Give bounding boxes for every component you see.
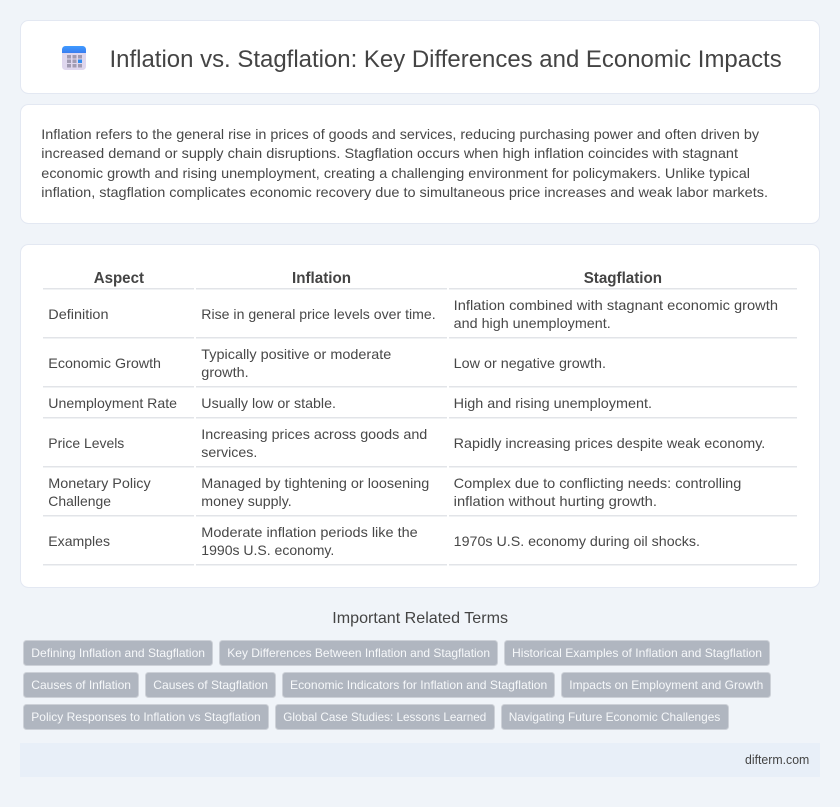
row: examples: Examples [48,533,110,549]
row: definition: Rise in general price levels over time. [201,306,436,322]
footer source: difterm.com [745,752,809,767]
row: economic growth: Economic Growth [48,355,161,371]
tag: impacts on employment [562,672,770,698]
description text: increased demand or supply chain disruptions. Stagflation occurs when high inflation coincides with stagnant [41,145,738,161]
row: examples: 1970s U.S. economy during oil shocks. [454,533,700,549]
tag: navigating future: Navigating Future Economic Challenges [509,710,720,724]
tag: causes of inflation [24,672,138,698]
row: economic growth: Typically positive or moderate [201,346,392,362]
header panel [20,20,820,94]
tag: key differences: Key Differences Between Inflation and Stagflation [227,646,490,660]
table header row: Inflation [292,270,351,287]
table header row: Stagflation [584,270,662,287]
row: monetary policy challenge: Managed by tightening or loosening [201,475,429,491]
tag: causes of stagflation: Causes of Stagflation [153,678,268,692]
row: definition: Inflation combined with stagnant economic growth [454,297,778,313]
footer bar [20,743,820,777]
tag: impacts on employment: Impacts on Employment and Growth [569,678,763,692]
row: unemployment rate: Unemployment Rate [48,395,177,411]
row: price levels: Increasing prices across goods and [201,426,427,442]
row: definition [43,297,797,338]
tag: global case studies [276,704,494,730]
row: definition: and high unemployment. [454,315,611,331]
row: economic growth: Low or negative growth. [454,355,606,371]
tag: key differences [220,640,498,666]
row: examples: Moderate inflation periods like the [201,524,418,540]
table header row [43,270,797,290]
row: monetary policy challenge: Complex due to conflicting needs: controlling [454,475,741,491]
row: examples [43,524,797,566]
row: monetary policy challenge: inflation without hurting growth. [454,493,657,509]
row: monetary policy challenge: Challenge [48,493,111,509]
description text: economic growth and rising unemployment, creating a challenging environment for policymakers. Unlike typical [41,165,750,181]
row: economic growth [43,346,797,388]
tag: economic indicators: Economic Indicators for Inflation and Stagflation [290,678,547,692]
row: price levels: services. [201,444,257,460]
heading: important related terms: Important Related Terms [332,610,508,627]
icon: calendar [62,46,86,70]
row: unemployment rate: Usually low or stable. [201,395,336,411]
tag: global case studies: Global Case Studies: Lessons Learned [283,710,486,724]
row: price levels: Rapidly increasing prices despite weak economy. [454,435,765,451]
tag: economic indicators [282,672,554,698]
row: monetary policy challenge: money supply. [201,493,292,509]
description text [41,126,768,200]
row: economic growth: growth. [201,364,249,380]
title: Inflation vs. Stagflation: Key Differences and Economic Impacts [110,46,782,73]
tag: historical examples: Historical Examples of Inflation and Stagflation [512,646,762,660]
tag: policy responses: Policy Responses to Inflation vs Stagflation [31,710,261,724]
description text: inflation, stagflation complicates economic recovery due to simultaneous price increases and weak labor markets. [41,184,768,200]
tag: policy responses [24,704,268,730]
panel: description [20,104,820,224]
table header row: Aspect [94,270,145,287]
row: unemployment rate: High and rising unemployment. [454,395,652,411]
tag: defining [24,640,212,666]
row: monetary policy challenge: Monetary Policy [48,475,151,491]
tag: historical examples [504,640,770,666]
related term tags [24,640,770,730]
row: examples: 1990s U.S. economy. [201,542,334,558]
row: unemployment rate [43,395,797,418]
tag: defining: Defining Inflation and Stagflation [31,646,205,660]
panel: comparison table [20,244,820,588]
row: definition: Definition [48,306,108,322]
tag: navigating future [502,704,728,730]
tag: causes of stagflation [146,672,276,698]
description text: Inflation refers to the general rise in prices of goods and services, reducing purchasing power and often driven by [41,126,759,142]
row: price levels: Price Levels [48,435,124,451]
row: monetary policy challenge [43,475,797,516]
tag: causes of inflation: Causes of Inflation [31,678,131,692]
row: price levels [43,426,797,468]
